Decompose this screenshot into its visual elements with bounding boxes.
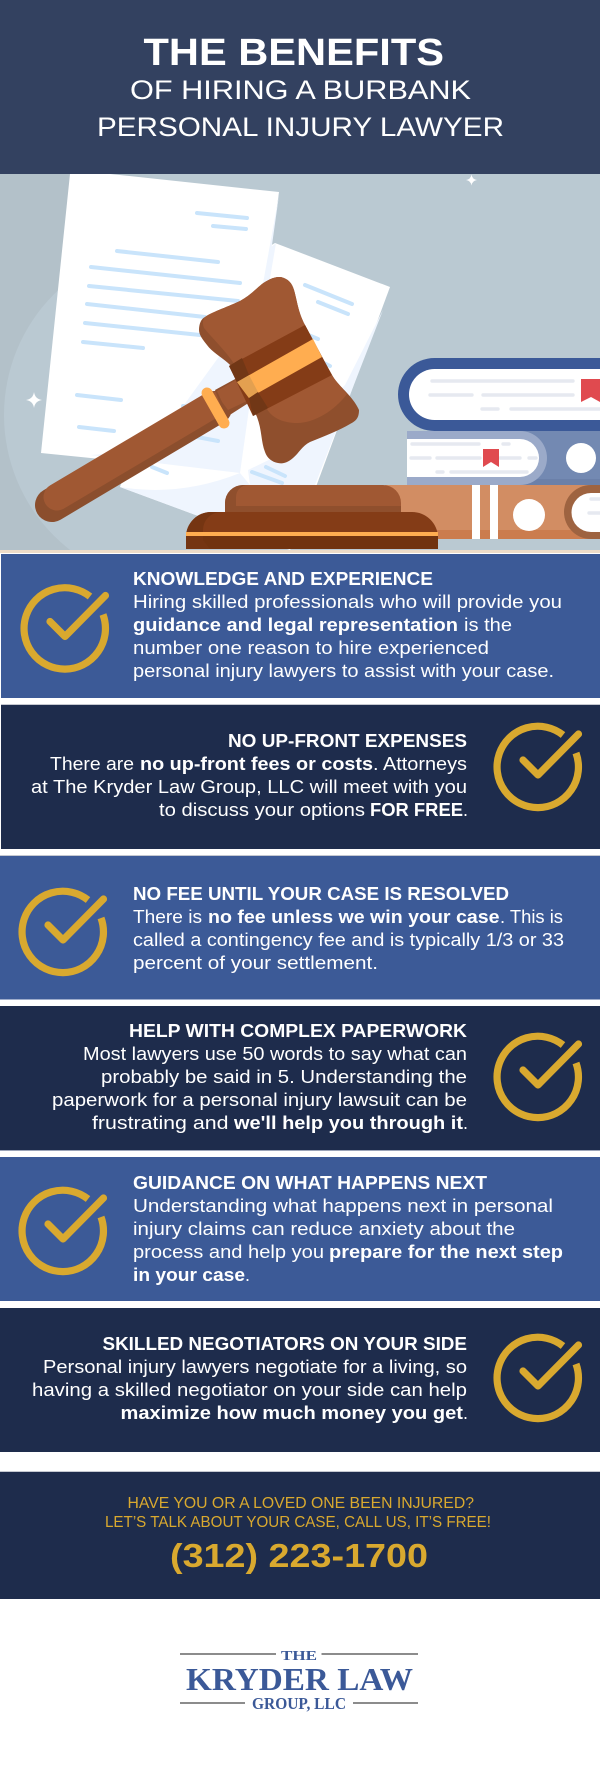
icon: check circle bbox=[24, 588, 105, 669]
heading: HELP WITH COMPLEX PAPERWORK bbox=[129, 1021, 467, 1041]
icon: check circle bbox=[497, 1337, 578, 1419]
call to action text: LET’S TALK ABOUT YOUR CASE, CALL US, IT’S FREE! bbox=[105, 1514, 491, 1531]
body text: number one reason to hire experienced bbox=[133, 638, 489, 658]
body text: . bbox=[463, 1403, 468, 1423]
title: PERSONAL INJURY LAWYER bbox=[97, 112, 504, 142]
body text: personal injury lawyers to assist with your case. bbox=[133, 661, 554, 681]
body text: is the bbox=[464, 615, 512, 635]
logo bbox=[180, 1649, 418, 1713]
body text: called a contingency fee and is typically 1/3 or 33 bbox=[133, 930, 564, 950]
heading: SKILLED NEGOTIATORS ON YOUR SIDE bbox=[102, 1334, 467, 1354]
logo: KRYDER LAW bbox=[186, 1661, 413, 1697]
panel: help with complex paperwork bbox=[0, 1006, 600, 1150]
call to action text: HAVE YOU OR A LOVED ONE BEEN INJURED? bbox=[128, 1495, 474, 1512]
panel: skilled negotiators bbox=[0, 1308, 600, 1452]
panel: no fee until resolved bbox=[0, 855, 600, 1000]
body text: prepare for the next step bbox=[329, 1242, 563, 1262]
middle blue book bbox=[407, 431, 600, 485]
title: OF HIRING A BURBANK bbox=[130, 75, 471, 105]
icon: front document bbox=[41, 174, 279, 473]
body text: in your case bbox=[133, 1265, 245, 1285]
heading: GUIDANCE ON WHAT HAPPENS NEXT bbox=[133, 1173, 487, 1193]
body text: . This is bbox=[500, 907, 563, 927]
gavel sound block bbox=[186, 485, 438, 549]
body text: There are bbox=[50, 754, 134, 774]
body text: . Attorneys bbox=[373, 754, 467, 774]
body text: no fee unless we win your case bbox=[208, 907, 500, 927]
icon: check circle bbox=[22, 891, 103, 973]
body text bbox=[52, 1044, 468, 1133]
body text: frustrating and bbox=[92, 1113, 228, 1133]
header band bbox=[0, 0, 600, 174]
body text: maximize how much money you get bbox=[120, 1403, 463, 1423]
body text: we'll help you through it bbox=[233, 1113, 463, 1133]
title: THE BENEFITS bbox=[144, 32, 444, 74]
logo: THE bbox=[281, 1649, 317, 1664]
title bbox=[97, 32, 504, 142]
phone number: (312) 223-1700 bbox=[170, 1537, 428, 1574]
heading: KNOWLEDGE AND EXPERIENCE bbox=[133, 569, 433, 589]
body text: FOR FREE bbox=[370, 800, 463, 820]
body text: at The Kryder Law Group, LLC will meet with you bbox=[31, 777, 467, 797]
body text: paperwork for a personal injury lawsuit can be bbox=[52, 1090, 467, 1110]
body text bbox=[32, 1357, 468, 1423]
tan divider bbox=[0, 550, 600, 553]
body text: . bbox=[245, 1265, 250, 1285]
icon: book stack bbox=[385, 358, 600, 539]
body text: probably be said in 5. Understanding the bbox=[101, 1067, 467, 1087]
icon: gavel bbox=[52, 277, 438, 549]
call to action text bbox=[105, 1495, 491, 1531]
top navy book bbox=[398, 358, 600, 431]
gavel head bbox=[199, 277, 359, 463]
heading: NO FEE UNTIL YOUR CASE IS RESOLVED bbox=[133, 884, 509, 904]
body text: injury claims can reduce anxiety about the bbox=[133, 1219, 515, 1239]
panel: no up-front expenses bbox=[1, 704, 600, 849]
call to action panel bbox=[0, 1471, 600, 1599]
body text: Most lawyers use 50 words to say what can bbox=[83, 1044, 467, 1064]
body text: to discuss your options bbox=[159, 800, 365, 820]
body text: There is bbox=[133, 907, 202, 927]
body text: Personal injury lawyers negotiate for a living, so bbox=[43, 1357, 467, 1377]
icon: check circle bbox=[22, 1190, 103, 1272]
body text: . bbox=[463, 1113, 468, 1133]
body text: percent of your settlement. bbox=[133, 953, 378, 973]
heading: NO UP-FRONT EXPENSES bbox=[228, 731, 467, 751]
body text: Hiring skilled professionals who will provide you bbox=[133, 592, 562, 612]
icon: sparkle top bbox=[466, 174, 477, 186]
icon: back document bbox=[120, 243, 390, 550]
bottom orange book bbox=[385, 485, 600, 539]
panel: knowledge and experience bbox=[1, 554, 600, 698]
icon: sparkle left bbox=[26, 392, 42, 408]
body text: guidance and legal representation bbox=[133, 615, 458, 635]
body text: process and help you bbox=[133, 1242, 324, 1262]
body text bbox=[133, 1196, 563, 1285]
logo: GROUP, LLC bbox=[252, 1694, 346, 1713]
body text bbox=[133, 907, 564, 973]
icon: check circle bbox=[497, 726, 578, 808]
body text: Understanding what happens next in personal bbox=[133, 1196, 553, 1216]
body text bbox=[133, 592, 562, 681]
illustration: gavel, documents and books bbox=[0, 174, 600, 586]
icon: check circle bbox=[497, 1036, 578, 1118]
body text: no up-front fees or costs bbox=[140, 754, 373, 774]
body text bbox=[31, 754, 468, 820]
body text: . bbox=[463, 800, 468, 820]
panel: guidance on what happens next bbox=[0, 1150, 600, 1301]
body text: having a skilled negotiator on your side can help bbox=[32, 1380, 467, 1400]
gavel handle bbox=[52, 378, 250, 505]
